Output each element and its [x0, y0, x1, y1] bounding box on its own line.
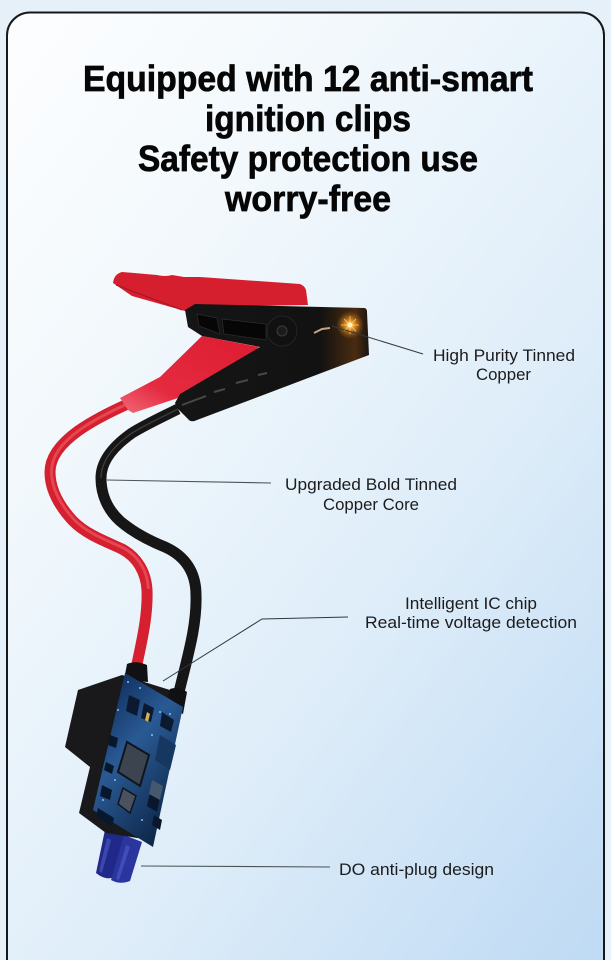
label: anti-plug design: DO anti-plug design: [339, 860, 494, 879]
label: upgraded copper core: [285, 475, 457, 514]
black clip: [175, 304, 369, 421]
circuit board: [93, 673, 183, 847]
leader line: IC chip: [163, 617, 348, 681]
black cable: [101, 409, 196, 692]
title: worry-free: [224, 178, 391, 219]
label: upgraded copper core: Copper Core: [323, 495, 419, 514]
title: [83, 58, 533, 219]
main chip: [118, 742, 149, 786]
title: Safety protection use: [138, 138, 478, 179]
label: high purity tinned copper: Copper: [476, 365, 531, 384]
grip ridges: [182, 373, 267, 405]
second chip: [118, 788, 136, 813]
cable ferrules: [124, 662, 148, 682]
label: upgraded copper core: Upgraded Bold Tinned: [285, 475, 457, 494]
clip upper window: [197, 314, 266, 340]
label: intelligent IC chip: Real-time voltage detection: [365, 613, 577, 632]
label: high purity tinned copper: [433, 346, 575, 384]
leader line: tinned copper: [332, 326, 423, 354]
pivot rivet: [267, 316, 297, 346]
label: intelligent IC chip: Intelligent IC chip: [405, 594, 537, 613]
red cable: [50, 402, 148, 664]
label: high purity tinned copper: High Purity Tinned: [433, 346, 575, 365]
spark highlight: [336, 311, 364, 339]
black housing: [65, 675, 170, 840]
leader line: plug design: [141, 866, 330, 867]
small components: [126, 695, 174, 732]
red clip: [113, 272, 308, 413]
copper teeth: [314, 328, 330, 333]
red upper jaw: [113, 272, 308, 311]
red lower jaw: [120, 336, 259, 413]
label: intelligent IC chip: [365, 594, 577, 632]
title: ignition clips: [205, 98, 411, 139]
board traces and lights: [102, 681, 171, 821]
leader line: copper core: [107, 480, 271, 483]
blue connector: [96, 825, 142, 883]
title: Equipped with 12 anti-smart: [83, 58, 533, 99]
IC chip module: [65, 662, 187, 847]
